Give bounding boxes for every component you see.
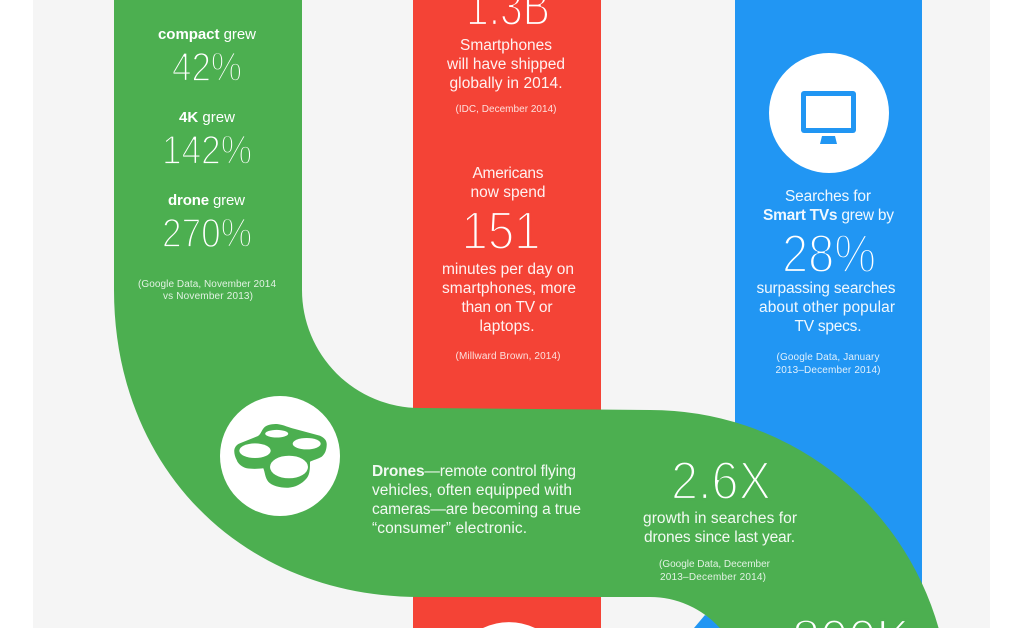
text: drones description [372,463,581,537]
icon: monitor [769,53,889,173]
text: drones description: vehicles, often equipped with [372,482,572,499]
text: searches for smart TVs: Smart TVs grew by [763,207,894,224]
text: drones description: cameras—are becoming a true [372,501,581,518]
text: minutes per day: laptops. [480,318,534,335]
text: surpassing searches: surpassing searches [756,280,896,297]
text: searches for smart TVs [763,188,894,224]
text: drones description: Drones—remote control flying [372,463,576,480]
panel: red smartphones column [413,0,601,628]
icon circle: bottom red panel [483,622,535,628]
blue wedge below green band [694,615,730,628]
text: Americans now spend [470,165,546,201]
text: drone grew: drone grew [168,192,245,209]
text: minutes per day: smartphones, more [442,280,576,297]
source: Google Data November [138,279,276,302]
text: minutes per day: minutes per day on [442,261,574,278]
text: growth in searches [643,510,797,546]
source: Google Data January [776,352,880,376]
source: IDC: (IDC, December 2014) [456,104,556,115]
text: smartphones shipped: globally in 2014. [450,75,562,92]
text: smartphones shipped: Smartphones [460,37,552,54]
text: smartphones shipped [446,37,565,92]
stat: 2.6X: 2.6X [671,451,771,511]
source: Google Data November: vs November 2013) [163,291,253,302]
text: smartphones shipped: will have shipped [446,56,565,73]
source: Google Data January: (Google Data, January [776,352,880,363]
text: surpassing searches: about other popular [759,299,895,316]
text: searches for smart TVs: Searches for [785,188,871,205]
text: surpassing searches [756,280,896,335]
stat: 151: 151 [462,201,540,261]
text: Americans now spend: now spend [470,184,546,201]
stat: 270%: 270% [162,210,252,256]
source: Millward Brown: (Millward Brown, 2014) [456,351,560,362]
icon: drone [220,396,340,516]
source: Google Data December: (Google Data, December [659,559,771,570]
text: drones description: “consumer” electronic. [372,520,527,537]
text: surpassing searches: TV specs. [794,318,862,335]
text: compact grew: compact grew [158,26,256,43]
stat: 28%: 28% [782,224,876,284]
text: growth in searches: drones since last year. [644,529,795,546]
text: growth in searches: growth in searches for [643,510,797,527]
source: Google Data November: (Google Data, November 2014 [138,279,276,290]
source: Google Data December [659,559,771,583]
source: Google Data January: 2013–December 2014) [776,365,880,376]
text: Americans now spend: Americans [472,165,544,182]
text: 4K grew: 4K grew [179,109,235,126]
stat: 142%: 142% [162,127,252,173]
text: minutes per day [442,261,576,335]
stat: 42%: 42% [172,44,242,90]
panel: blue smart TV column [694,0,922,628]
text: minutes per day: than on TV or [462,299,552,316]
source: Google Data December: 2013–December 2014) [660,572,766,583]
